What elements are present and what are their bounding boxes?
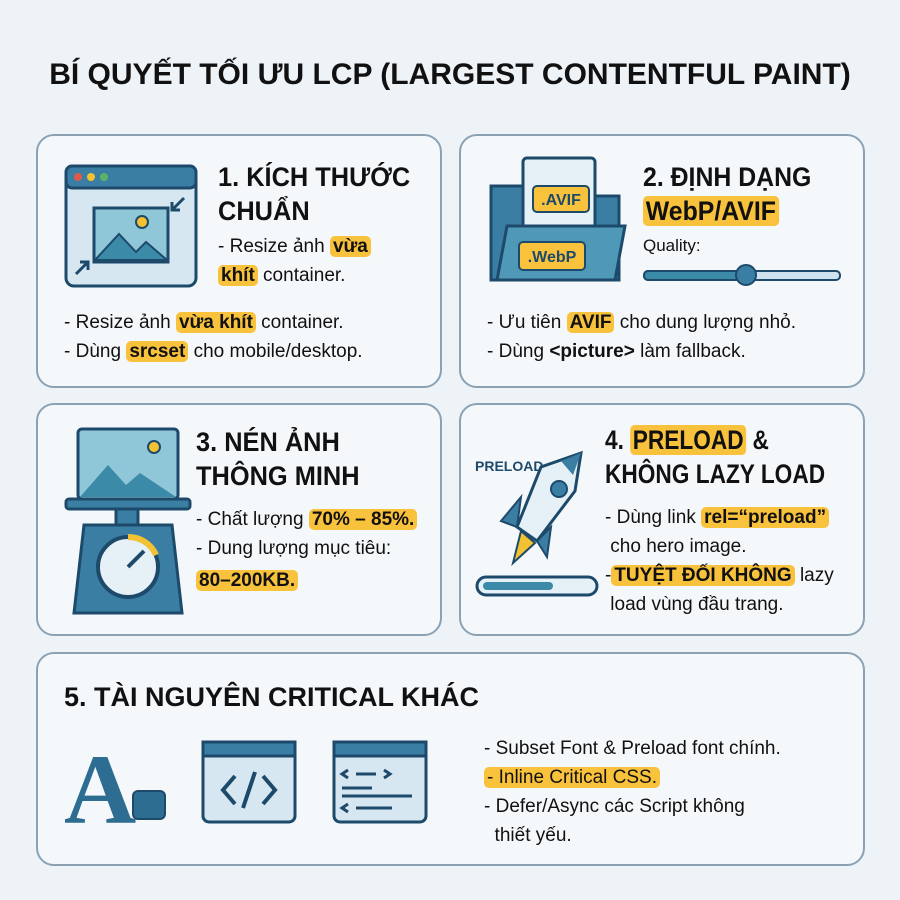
title: BÍ QUYẾT TỐI ƯU LCP (LARGEST CONTENTFUL PAINT): [49, 58, 851, 91]
icon: code: [202, 740, 296, 824]
heading 3: 3. NÉN ẢNH: [196, 427, 340, 457]
heading 4: 4. PRELOAD &: [605, 425, 769, 455]
text bullets: [196, 509, 417, 591]
panel: preload: [459, 403, 865, 636]
text bullets: - Inline Critical CSS.: [487, 767, 657, 788]
text bullets: -TUYỆT ĐỐI KHÔNG lazy: [605, 565, 834, 586]
text bullets: 80–200KB.: [199, 570, 295, 591]
heading 1: [218, 162, 410, 226]
panel: định dạng: [459, 134, 865, 388]
text bullets: load vùng đầu trang.: [610, 594, 784, 615]
text bullets: - Dung lượng mục tiêu:: [196, 538, 391, 559]
icon: css file: [332, 740, 428, 824]
text: bullets: [64, 312, 363, 362]
text: resize: khít container.: [221, 265, 345, 286]
panel: nén ảnh: [36, 403, 442, 636]
heading 4: [605, 425, 825, 489]
heading 1: CHUẨN: [218, 196, 310, 226]
text: resize: [218, 236, 371, 286]
slider quality: [643, 236, 841, 286]
text bullets: - Defer/Async các Script không: [484, 796, 745, 817]
icon: rocket: PRELOAD: [475, 458, 543, 474]
text bullets: [487, 312, 796, 362]
icon: font: A: [64, 734, 136, 845]
text: bullets: - Resize ảnh vừa khít container.: [64, 312, 344, 333]
text bullets: [605, 507, 834, 615]
panel: kích thước chuẩn: [36, 134, 442, 388]
heading 5: 5. TÀI NGUYÊN CRITICAL KHÁC: [64, 682, 479, 712]
text bullets: cho hero image.: [610, 536, 747, 557]
heading 1: 1. KÍCH THƯỚC: [218, 162, 410, 192]
icon: rocket: [475, 450, 598, 596]
icon: browser resize: [64, 164, 198, 288]
heading 3: [196, 427, 360, 491]
text bullets: - Dùng link rel=“preload”: [605, 507, 826, 528]
text bullets: - Subset Font & Preload font chính.: [484, 738, 781, 759]
icon: folder files: .AVIF: [541, 192, 581, 209]
text: bullets: - Dùng srcset cho mobile/desktop.: [64, 341, 363, 362]
text bullets: - Dùng <picture> làm fallback.: [487, 341, 746, 362]
text bullets: thiết yếu.: [495, 825, 572, 846]
slider quality: Quality:: [643, 236, 701, 255]
text: resize: - Resize ảnh vừa: [218, 236, 368, 257]
heading 2: 2. ĐỊNH DẠNG: [643, 162, 811, 192]
icon: folder files: .WebP: [528, 249, 577, 266]
heading 2: [643, 162, 811, 226]
icon: folder files: [490, 156, 627, 282]
panel: tài nguyên critical: [36, 652, 865, 866]
text bullets: - Chất lượng 70% – 85%.: [196, 509, 414, 530]
text bullets: [484, 738, 781, 846]
text bullets: - Ưu tiên AVIF cho dung lượng nhỏ.: [487, 312, 796, 333]
heading 3: THÔNG MINH: [196, 461, 360, 491]
icon: scale: [64, 428, 192, 614]
heading 4: KHÔNG LAZY LOAD: [605, 459, 825, 489]
heading 2: WebP/AVIF: [646, 196, 776, 226]
